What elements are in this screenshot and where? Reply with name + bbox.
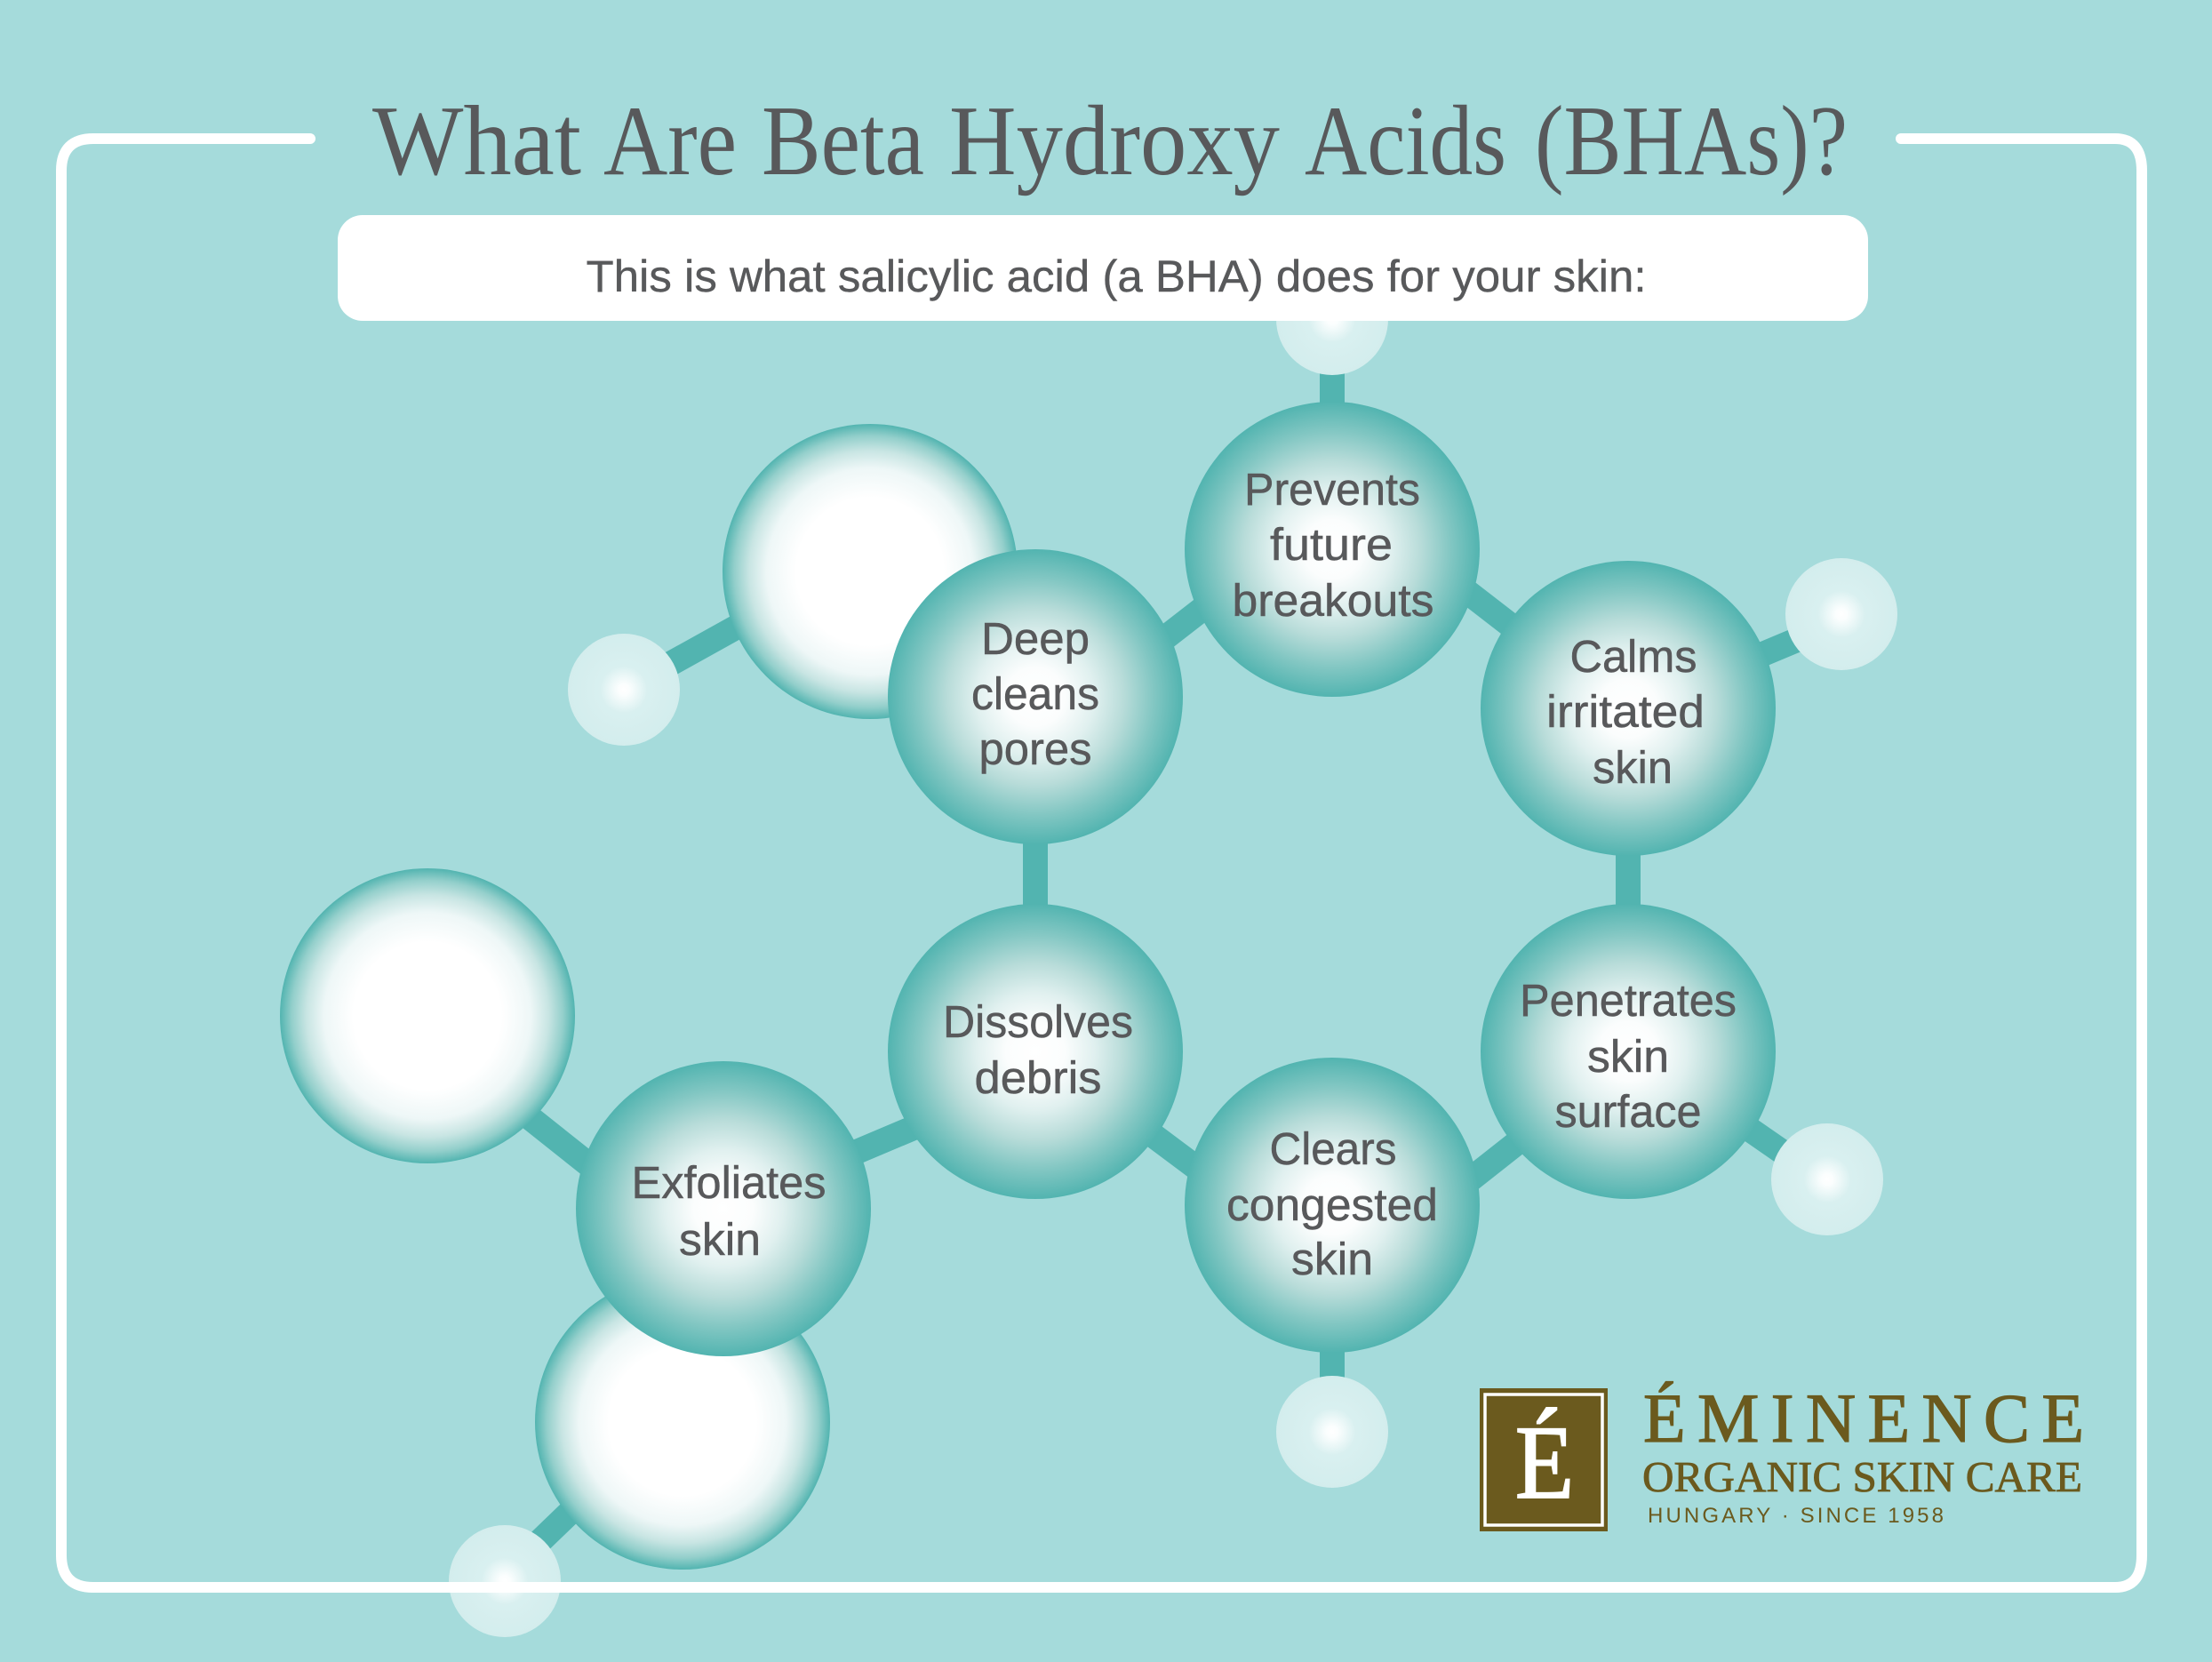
node: exfoliates skin [576,1061,871,1356]
node: exfoliates skin: skin [679,1214,761,1265]
subtitle bar [338,215,1868,321]
node: deep cleans pores [888,549,1183,844]
node: calms irritated skin: skin [1593,742,1673,793]
logo mark [1480,1388,1608,1531]
node: prevents future breakouts [1185,402,1480,697]
small atom: bottom left [449,1525,561,1637]
node: deep cleans pores: cleans [971,668,1099,719]
small atom: upper left [568,634,680,746]
node: penetrates skin surface: Penetrates [1520,975,1737,1026]
title: Are [603,86,737,196]
brand name: ÉMINENCE [1643,1379,2084,1457]
small atom: bottom centre [1276,1376,1388,1488]
node: dissolves debris [888,904,1183,1199]
node: calms irritated skin [1481,561,1776,856]
node: dissolves debris: debris [974,1052,1102,1103]
title: What [372,86,581,196]
node: prevents future breakouts: breakouts [1232,575,1434,626]
node: penetrates skin surface: surface [1555,1086,1701,1137]
title: Hydroxy [949,86,1280,196]
node: dissolves debris: Dissolves [943,996,1133,1047]
title: Acids [1305,86,1506,196]
small atom: lower right [1771,1123,1883,1235]
node: clears congested skin: Clears [1269,1123,1397,1174]
title: (BHAs)? [1535,86,1848,196]
small atom: top [1276,263,1388,375]
molecule bonds [471,319,1831,1582]
title [372,86,1848,196]
brand descriptor: ORGANIC SKIN CARE [1642,1452,2082,1501]
node: clears congested skin [1185,1058,1480,1353]
logo: Eminence Organic Skin Care [1480,1379,2084,1531]
node: prevents future breakouts: Prevents [1244,464,1420,515]
empty atom: upper left [723,424,1018,719]
logo mark: É [1515,1404,1574,1521]
node: deep cleans pores: Deep [981,613,1090,664]
node: prevents future breakouts: future [1270,519,1393,570]
brand tagline: HUNGARY · SINCE 1958 [1648,1504,1944,1528]
node: exfoliates skin: Exfoliates [631,1157,827,1208]
node: deep cleans pores: pores [979,723,1091,774]
node: clears congested skin: skin [1291,1234,1373,1284]
subtitle bar: This is what salicylic acid (a BHA) does for your skin: [587,252,1646,301]
node: penetrates skin surface: skin [1587,1031,1669,1082]
node: clears congested skin: congested [1226,1179,1438,1230]
empty atom: bottom left [535,1274,830,1570]
node: calms irritated skin: irritated [1546,686,1705,737]
small atom: upper right [1785,558,1897,670]
empty atom: left [280,868,575,1163]
node: penetrates skin surface [1481,904,1776,1199]
node: calms irritated skin: Calms [1569,631,1697,682]
title: Beta [762,86,924,196]
